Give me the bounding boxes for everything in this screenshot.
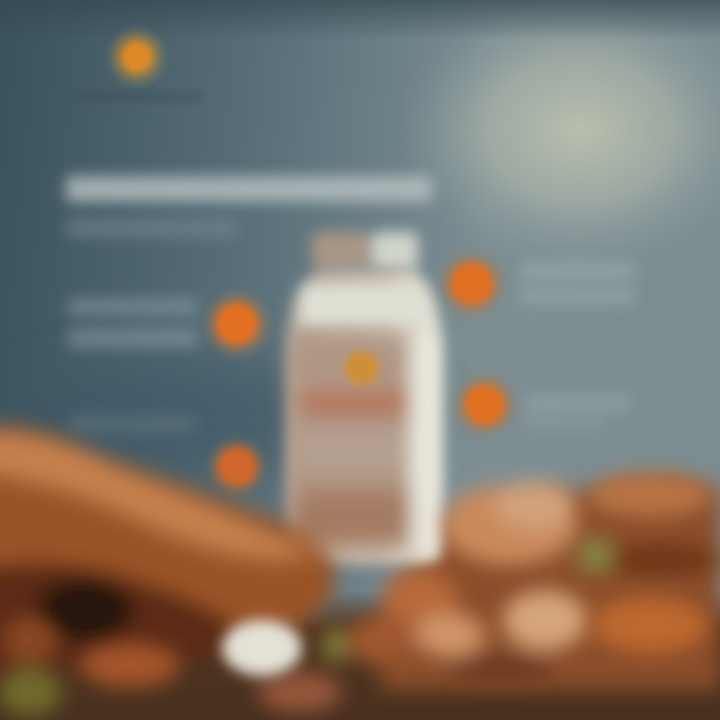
title xyxy=(66,176,432,238)
almond pile: centre xyxy=(323,481,587,684)
logo: sun icon xyxy=(78,30,203,102)
marker: orange circle lower left xyxy=(209,439,265,495)
white capsule xyxy=(222,620,302,676)
bottle cap xyxy=(312,232,418,270)
almond pile: right xyxy=(577,473,718,653)
bottle xyxy=(288,232,440,565)
marker: orange circle right xyxy=(454,374,516,436)
marker: orange circle top right xyxy=(440,252,504,316)
bottle label xyxy=(290,335,438,550)
almond pile: left large xyxy=(0,424,335,680)
bottle body xyxy=(288,268,440,565)
text block: left upper xyxy=(68,298,198,348)
text block: right upper xyxy=(520,262,635,304)
marker: orange circle left xyxy=(205,292,269,356)
almond pile: bottom left xyxy=(0,616,342,716)
text block: left lower xyxy=(70,415,195,433)
ground and base xyxy=(0,480,720,720)
bottle label sun icon xyxy=(345,351,379,385)
text block: right lower xyxy=(525,395,630,428)
